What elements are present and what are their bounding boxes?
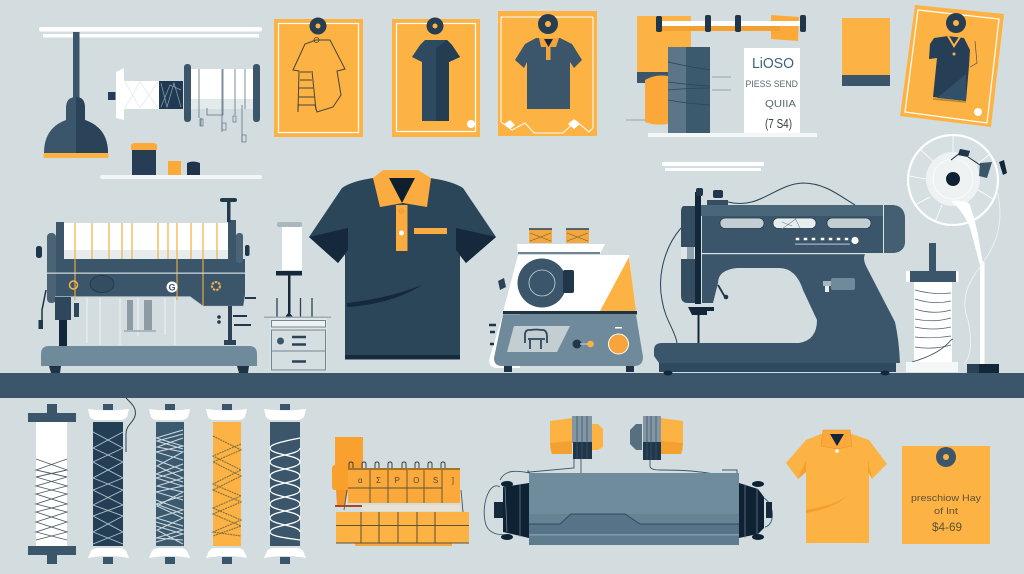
spool: white [28, 404, 76, 564]
price tag [902, 446, 990, 544]
orange polo shirt [786, 430, 887, 543]
icon: thread spool with hanging needles [108, 64, 260, 142]
poster: dark dress [392, 18, 480, 137]
shelf with jars [100, 143, 262, 179]
spool: orange [206, 404, 247, 564]
poster: polo shirt [498, 11, 597, 136]
decorative white lines [662, 162, 764, 171]
price card [744, 48, 800, 133]
icon: white thread spool on stand [906, 243, 958, 372]
price card: PIESS SEND [746, 79, 798, 90]
machine: sewing machine [654, 183, 905, 376]
poster: tilted shirt [900, 5, 1004, 127]
price card: LiOSO [752, 56, 794, 72]
machine: white winding unit [489, 229, 643, 372]
price card: (7 S4) [765, 117, 792, 131]
machine: thread loom [36, 198, 257, 373]
poster: outlined shirt [274, 18, 363, 137]
price tag: preschiow Hay [911, 493, 981, 504]
spool: dark navy [88, 398, 135, 564]
bottom row: thread spools [28, 398, 306, 564]
orange keyboard unit: ɑ Σ P O S ] [358, 476, 454, 485]
spool: slate with white zigzag [264, 404, 306, 564]
spool: steel with white lines [149, 404, 190, 564]
machine: fan with stand [908, 135, 1007, 373]
price tag: of lnt [934, 506, 958, 517]
icon: hanging lamp [39, 27, 262, 158]
machine: cabinet with bottle [264, 222, 331, 371]
machine: thread loom: G [168, 282, 176, 292]
grey motor with orange spools [484, 416, 772, 545]
price card: QUIIA [765, 99, 796, 110]
price tag: $4-69 [932, 522, 962, 534]
shelf bar [0, 373, 1024, 398]
orange panel [842, 18, 890, 86]
orange keyboard unit [332, 437, 469, 546]
display: rod with orange panel and block [626, 15, 817, 137]
large navy polo shirt [309, 170, 496, 360]
